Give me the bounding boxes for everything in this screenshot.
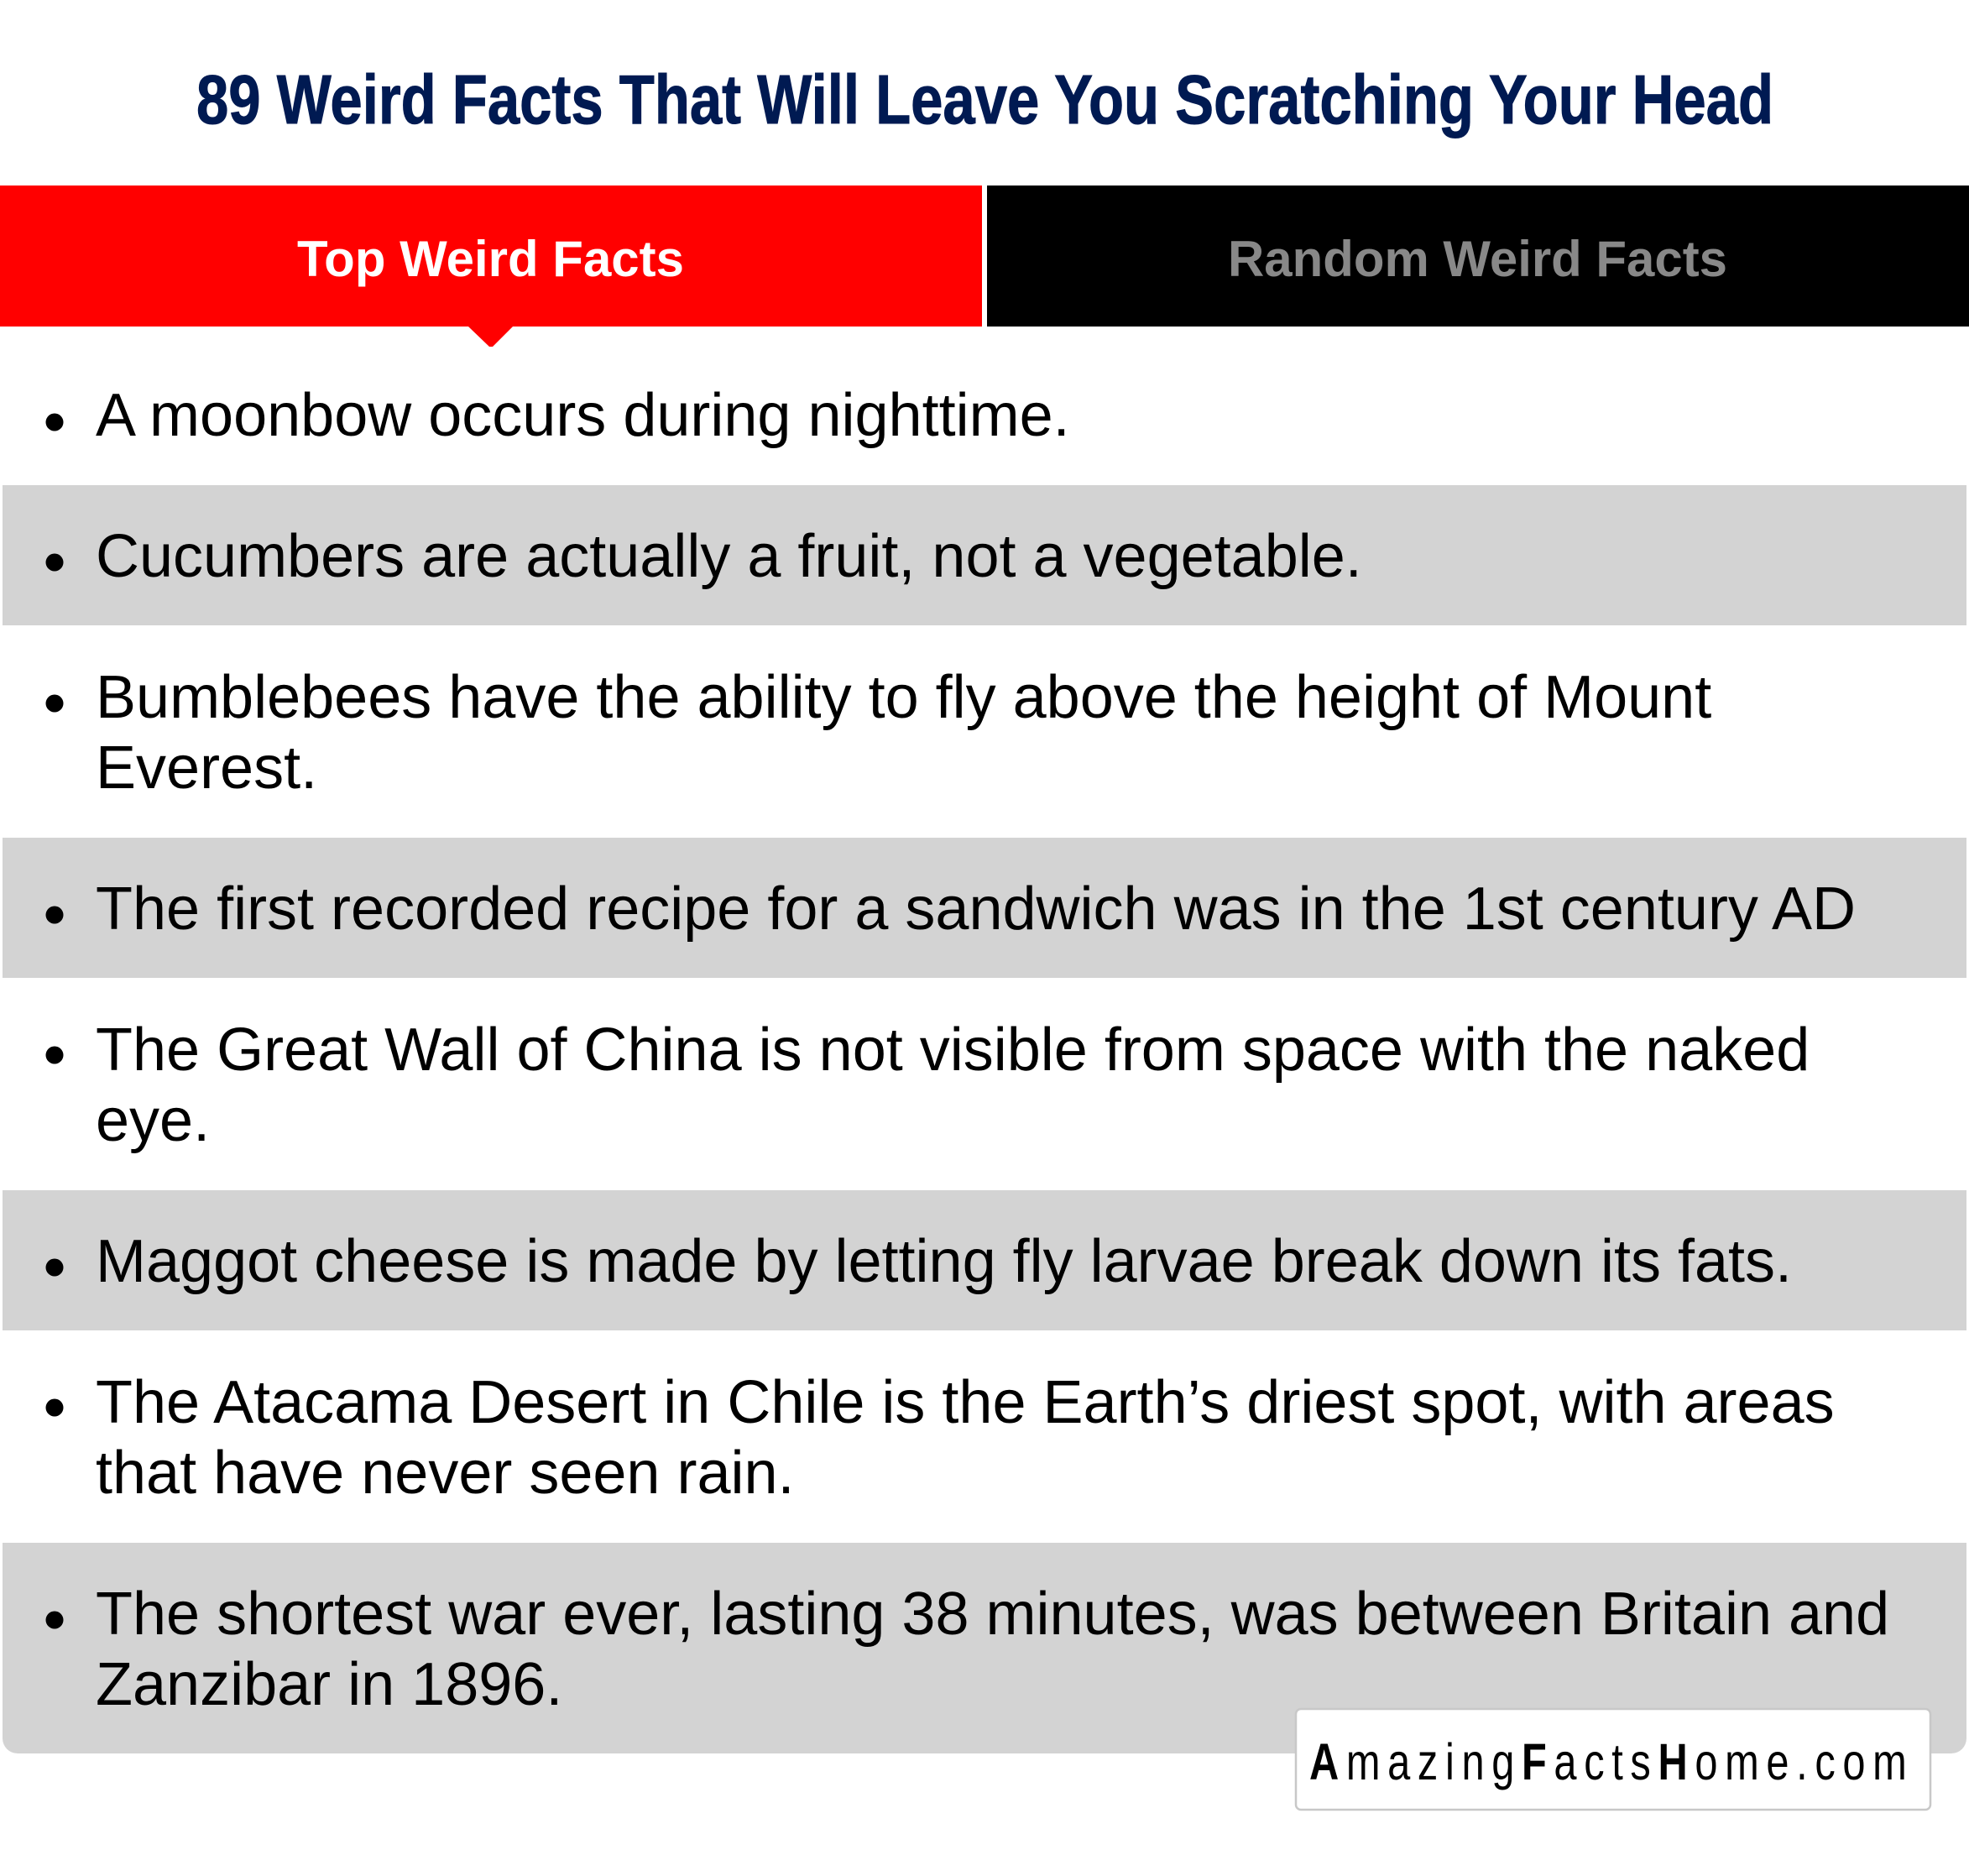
fact 3: Bumblebees have the ability to fly above the height of Mount [96,664,1711,731]
active tab: Top Weird Facts [0,186,982,347]
fact 2: Cucumbers are actually a fruit, not a vegetable. [96,523,1362,590]
inactive tab: Random Weird Facts [987,186,1969,327]
fact 2 [3,485,1966,625]
active tab: Top Weird Facts: Top Weird Facts [297,231,684,287]
watermark: AmazingFactsHome.com [1296,1709,1930,1810]
fact 7 [45,1369,1835,1507]
fact 3 [45,664,1711,802]
fact 3: Everest. [96,734,317,802]
fact 8: Zanzibar in 1896. [96,1651,562,1718]
fact 6 [3,1190,1966,1330]
fact 5: The Great Wall of China is not visible from space with the naked [96,1016,1810,1084]
fact 4: The first recorded recipe for a sandwich was in the 1st century AD [96,875,1856,943]
fact 5 [45,1016,1810,1154]
watermark: AmazingFactsHome.com: AmazingFactsHome.com [1309,1733,1914,1790]
fact 7: The Atacama Desert in Chile is the Earth’s driest spot, with areas [96,1369,1835,1436]
fact 7: that have never seen rain. [96,1440,795,1507]
fact 8 [3,1543,1966,1753]
fact 6: Maggot cheese is made by letting fly larvae break down its fats. [96,1228,1792,1295]
fact 4 [3,838,1966,978]
fact 8: The shortest war ever, lasting 38 minutes, was between Britain and [96,1581,1889,1648]
fact 5: eye. [96,1087,210,1154]
fact 1: A moonbow occurs during nighttime. [96,382,1070,449]
inactive tab: Random Weird Facts: Random Weird Facts [1228,231,1727,287]
